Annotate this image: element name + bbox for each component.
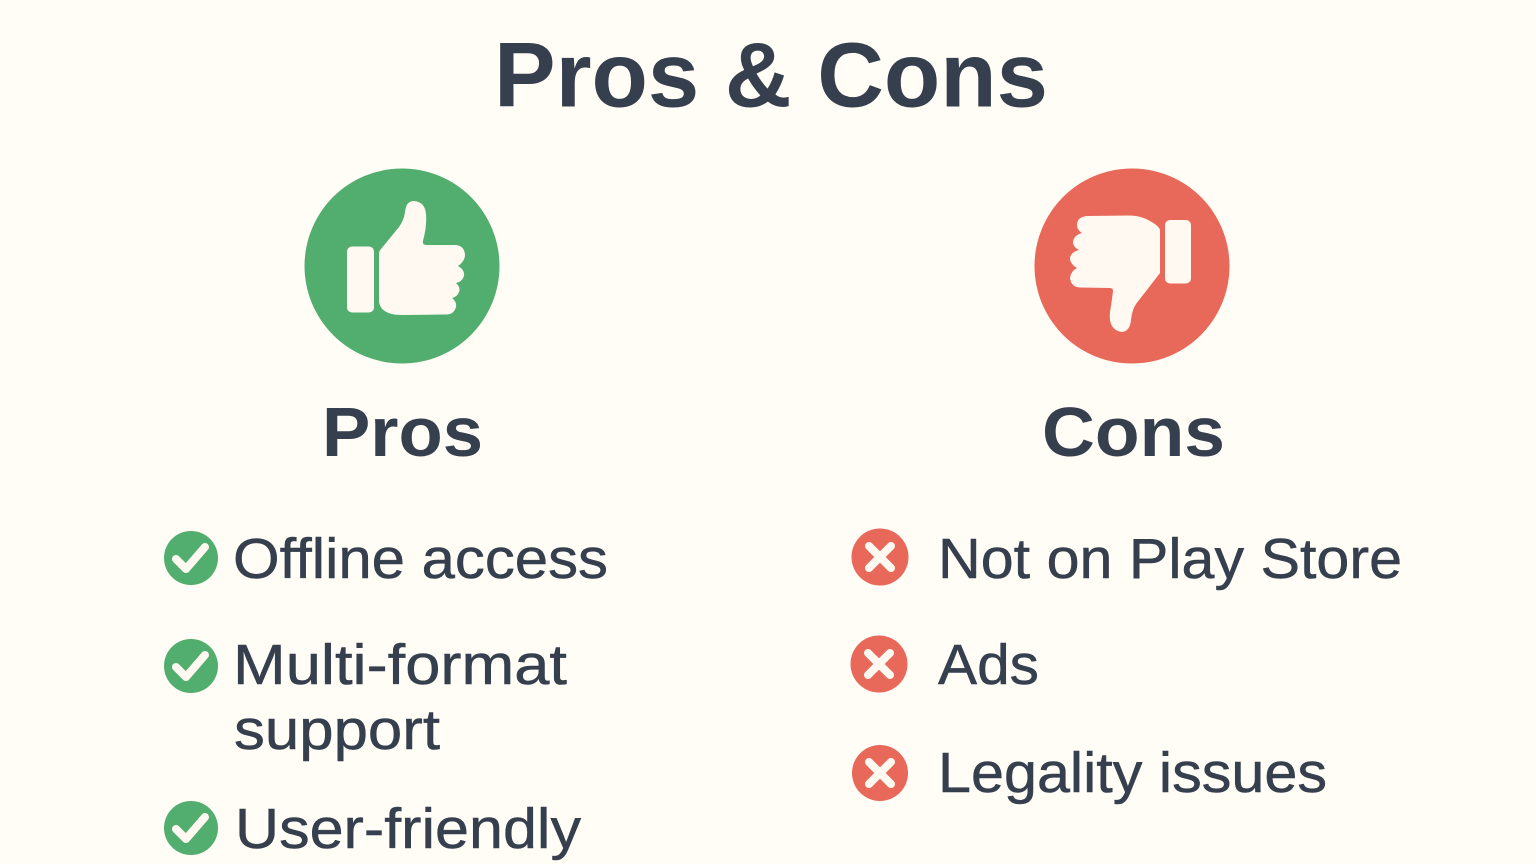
panel: cons — [850, 168, 1402, 805]
list item: multi-format support: Multi-format — [233, 633, 567, 697]
list item: legality issues: Legality issues — [938, 741, 1327, 805]
heading: cons: Cons — [1042, 393, 1225, 471]
list item: multi-format support — [164, 633, 567, 762]
list item: multi-format support: support — [234, 698, 440, 762]
icon: thumbs down — [1034, 168, 1230, 364]
panel: pros — [164, 168, 608, 861]
list item: ads: Ads — [938, 633, 1039, 697]
title: Pros & Cons — [494, 24, 1048, 126]
heading: pros: Pros — [322, 393, 483, 471]
list item: offline access: Offline access — [233, 527, 608, 591]
list item: user-friendly: User-friendly — [235, 797, 582, 861]
list item: ads — [850, 633, 1039, 697]
icon: thumbs up — [304, 168, 500, 364]
list item: not on play store: Not on Play Store — [938, 527, 1402, 591]
